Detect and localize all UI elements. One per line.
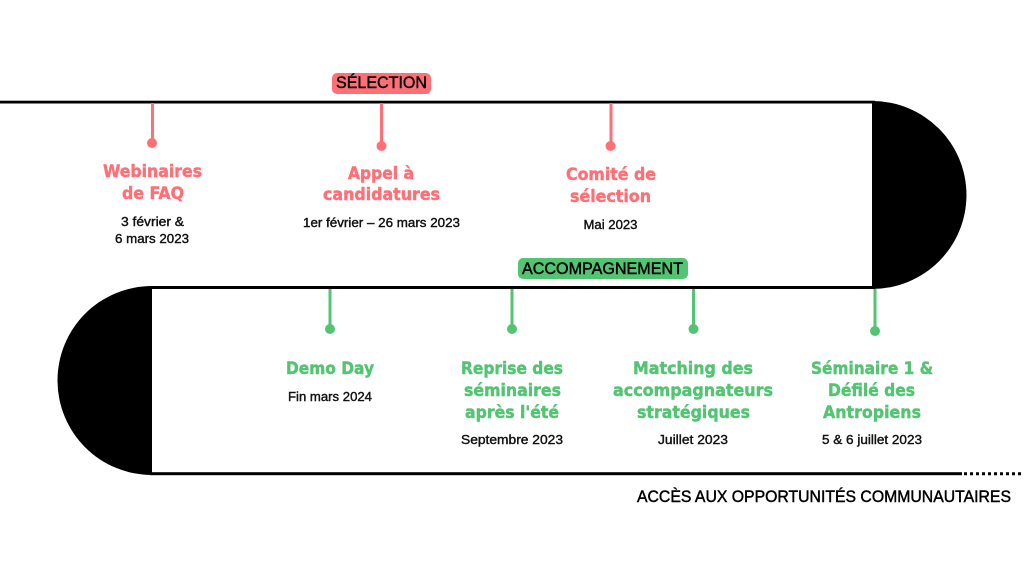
- step: appel à candidatures: Appel à: [348, 164, 414, 184]
- step: séminaire 1 et défilé: [811, 359, 933, 447]
- badge: accompagnement: ACCOMPAGNEMENT: [522, 260, 683, 278]
- marker: reprise des séminaires: [507, 289, 517, 334]
- marker: appel à candidatures: [376, 103, 386, 151]
- step: webinaires de FAQ: 3 février &: [121, 215, 185, 229]
- right black half circle: [872, 101, 966, 289]
- closing label: ACCÈS AUX OPPORTUNITÉS COMMUNAUTAIRES: [637, 487, 1011, 506]
- step: webinaires de FAQ: de FAQ: [122, 184, 184, 204]
- step: séminaire 1 et défilé: Antropiens: [823, 403, 921, 423]
- step: reprise des séminaires: après l'été: [465, 403, 559, 423]
- dotted line extension: [964, 472, 1021, 475]
- step: comité de sélection: Mai 2023: [584, 218, 638, 232]
- step: comité de sélection: sélection: [570, 187, 651, 207]
- step: séminaire 1 et défilé: Défilé des: [828, 381, 915, 401]
- marker: webinaires: [147, 103, 157, 148]
- step: webinaires de FAQ: Webinaires: [103, 162, 202, 182]
- step: reprise des séminaires: Septembre 2023: [461, 433, 563, 447]
- marker: matching: [688, 289, 698, 334]
- step: comité de sélection: Comité de: [566, 165, 656, 185]
- serpentine track: [0, 101, 966, 475]
- marker: comité de sélection: [606, 103, 616, 151]
- step: reprise des séminaires: séminaires: [464, 381, 561, 401]
- badge: sélection: SÉLECTION: [336, 73, 427, 92]
- step: demo day: Fin mars 2024: [288, 390, 372, 404]
- step: demo day: Demo Day: [286, 359, 374, 379]
- step: appel à candidatures: candidatures: [323, 185, 440, 205]
- marker: demo day: [325, 289, 335, 334]
- step: matching des accompagnateurs stratégiques: stratégiques: [637, 403, 750, 423]
- step: reprise des séminaires: Reprise des: [461, 359, 563, 379]
- step: webinaires de FAQ: [103, 162, 202, 246]
- step: matching des accompagnateurs stratégiques: Matching des: [633, 359, 753, 379]
- step: matching des accompagnateurs stratégiques: accompagnateurs: [613, 381, 773, 401]
- step: matching des accompagnateurs stratégiques: Juillet 2023: [658, 433, 728, 447]
- step: séminaire 1 et défilé: Séminaire 1 &: [811, 359, 933, 379]
- step: webinaires de FAQ: 6 mars 2023: [115, 232, 189, 246]
- left black half circle: [57, 286, 152, 475]
- step: séminaire 1 et défilé: 5 & 6 juillet 2023: [822, 433, 922, 447]
- marker: séminaire 1: [870, 289, 880, 336]
- step: appel à candidatures: [303, 164, 460, 230]
- step: demo day: [286, 359, 374, 404]
- step: reprise des séminaires: [461, 359, 563, 447]
- step: appel à candidatures: 1er février – 26 mars 2023: [303, 216, 460, 230]
- step: comité de sélection: [566, 165, 656, 232]
- step: matching des accompagnateurs stratégiques: [613, 359, 773, 447]
